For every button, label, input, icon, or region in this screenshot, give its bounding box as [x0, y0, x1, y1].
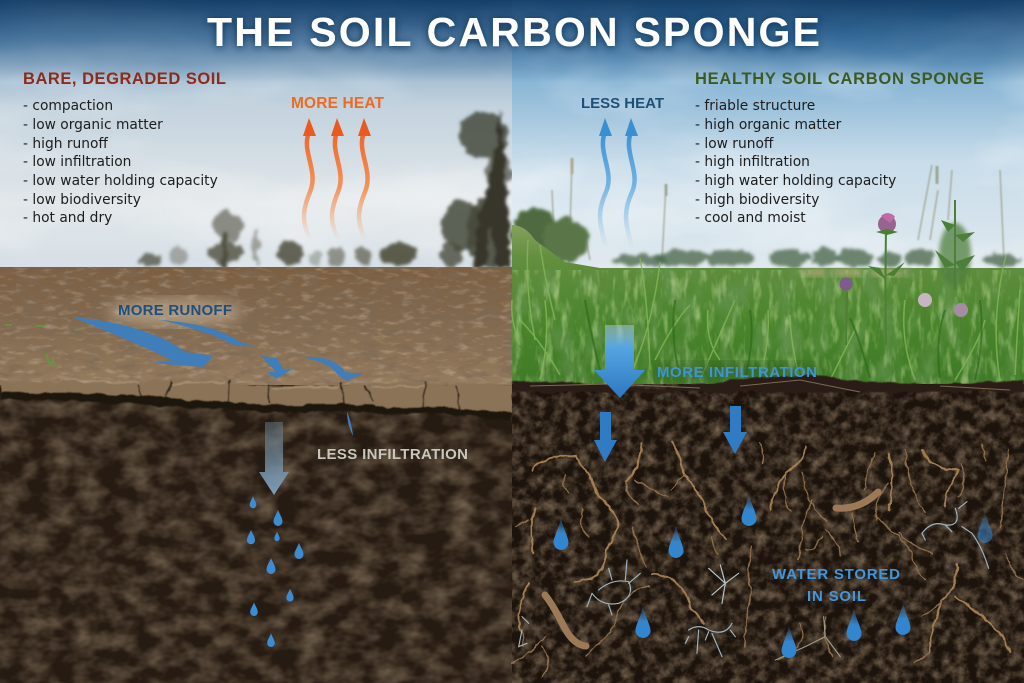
icon: sparse water droplets — [247, 496, 304, 647]
clover flower heads — [840, 213, 968, 317]
distant bare trees — [139, 211, 417, 267]
icon: cool rising arrows — [599, 118, 638, 247]
panel: healthy soil carbon sponge — [511, 0, 1024, 683]
top title band shade — [0, 0, 1024, 82]
grass seed stalks in the sky — [552, 158, 1004, 265]
list: healthy soil traits: - friable structure — [695, 98, 815, 114]
mycelium networks — [519, 502, 989, 660]
list: degraded soil traits: - low water holding capacity — [23, 173, 218, 189]
list: degraded soil traits: - high runoff — [23, 136, 108, 152]
sky: left — [0, 0, 512, 270]
list: healthy soil traits: - high infiltration — [695, 154, 810, 170]
sky: right — [512, 0, 1024, 268]
wildflowers — [840, 200, 975, 345]
list: degraded soil traits — [23, 98, 218, 226]
list: degraded soil traits: - compaction — [23, 98, 113, 114]
list: degraded soil traits: - hot and dry — [23, 210, 112, 226]
icon: small infiltration arrows — [594, 406, 747, 462]
label: less infiltration: LESS INFILTRATION — [317, 446, 468, 463]
list: healthy soil traits: - low runoff — [695, 136, 774, 152]
label: more heat: MORE HEAT — [291, 95, 385, 112]
list: degraded soil traits: - low infiltration — [23, 154, 131, 170]
earthworms — [545, 492, 878, 646]
icon: runoff arrows — [72, 317, 362, 436]
title: THE SOIL CARBON SPONGE — [207, 9, 820, 55]
large tree on right edge — [440, 110, 511, 268]
grass meadow — [512, 225, 1024, 386]
soil cross-section — [0, 378, 512, 683]
label: more runoff: MORE RUNOFF — [118, 302, 232, 319]
label: more infiltration: MORE INFILTRATION — [657, 364, 817, 381]
icon: big infiltration arrow — [594, 325, 645, 398]
list: healthy soil traits: - high organic matter — [695, 117, 842, 133]
list: degraded soil traits: - low biodiversity — [23, 192, 141, 208]
cracked ground surface — [0, 267, 512, 407]
dark living soil — [512, 376, 1024, 683]
label: less heat: LESS HEAT — [581, 95, 664, 112]
label: more runoff — [107, 298, 243, 326]
label: water stored in soil: IN SOIL — [807, 588, 866, 605]
list: healthy soil traits: - high water holding capacity — [695, 173, 896, 189]
icon: weak infiltration arrow — [259, 422, 289, 495]
roots — [512, 442, 1022, 677]
list: healthy soil traits: - high biodiversity — [695, 192, 819, 208]
distant treeline — [511, 208, 1020, 268]
list: healthy soil traits — [695, 98, 896, 226]
heading: bare degraded soil: BARE, DEGRADED SOIL — [23, 70, 226, 88]
list: degraded soil traits: - low organic matter — [23, 117, 163, 133]
icon: rising heat arrows — [303, 118, 371, 240]
panel: bare degraded soil — [0, 0, 512, 683]
sprouts — [5, 325, 84, 366]
icon: stored water droplets — [554, 493, 992, 658]
list: healthy soil traits: - cool and moist — [695, 210, 806, 226]
heading: healthy soil: HEALTHY SOIL CARBON SPONGE — [695, 70, 984, 88]
crumbling soil lip — [0, 378, 512, 420]
label: water stored in soil: WATER STORED — [772, 566, 900, 583]
